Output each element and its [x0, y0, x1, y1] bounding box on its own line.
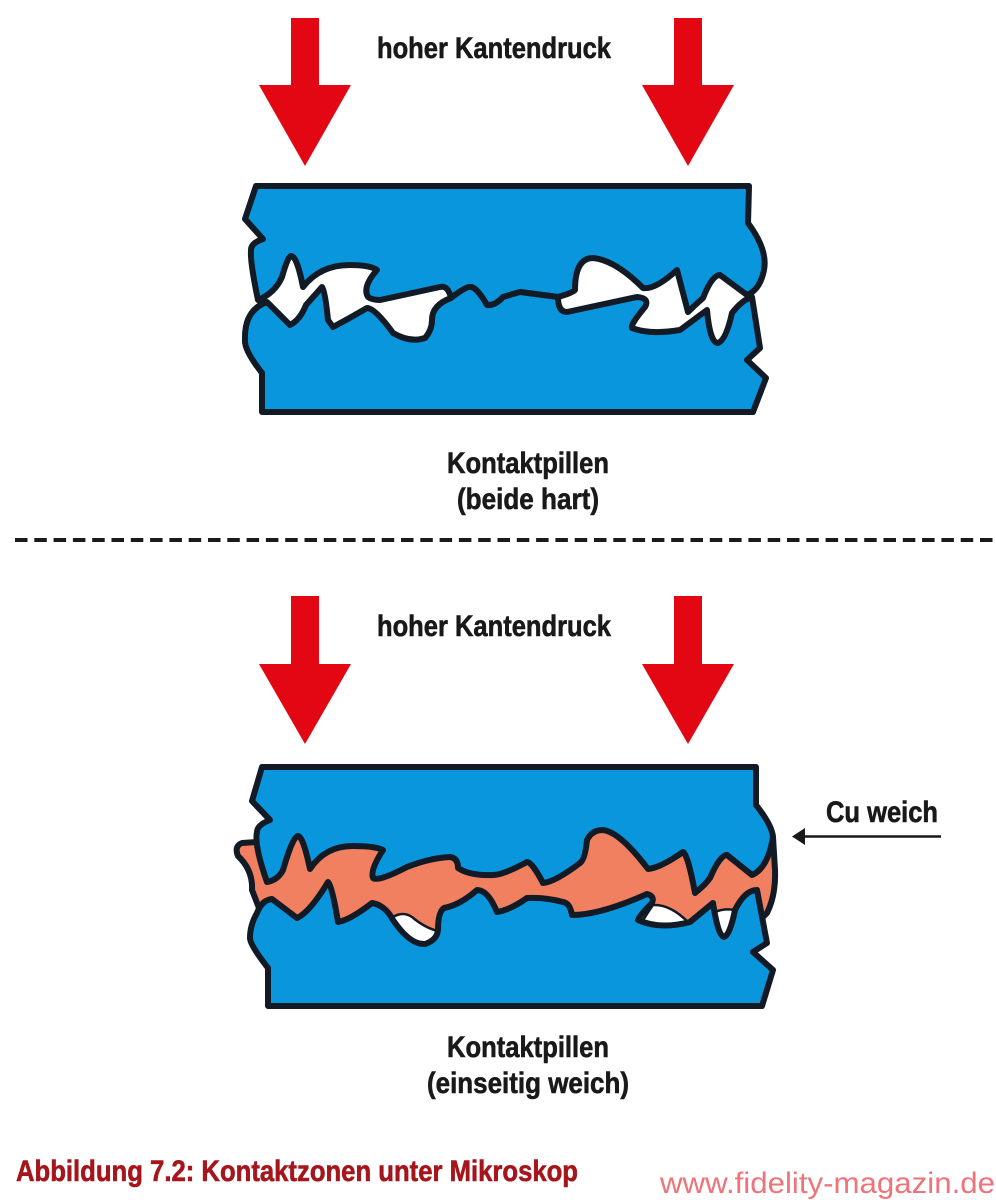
arrow: left pressure arrow, bottom panel	[259, 596, 351, 744]
caption: contact pads both hard: Kontaktpillen	[447, 447, 609, 480]
diagram: hard pad against soft copper pad	[237, 767, 775, 1006]
white air pocket, right	[715, 909, 735, 945]
diagram: two hard contact pads	[245, 186, 766, 412]
figure caption: Abbildung 7.2: Kontaktzonen unter Mikroskop	[16, 1155, 578, 1188]
heading: high edge pressure, bottom panel: hoher Kantendruck	[377, 610, 612, 643]
upper hard contact pad	[252, 767, 773, 893]
caption: contact pads one side soft	[427, 1031, 629, 1100]
white air pocket, centre right	[640, 905, 688, 935]
lower hard contact pad	[245, 287, 766, 412]
watermark url: www.fidelity-magazin.de	[659, 1167, 995, 1200]
arrow: right pressure arrow, top panel	[642, 18, 734, 166]
caption: contact pads one side soft: Kontaktpillen	[447, 1031, 609, 1064]
caption: contact pads both hard: (beide hart)	[457, 483, 599, 516]
lower hard contact pad	[250, 882, 773, 1006]
panel: both contacts hard	[245, 18, 766, 516]
soft copper layer	[237, 810, 775, 960]
callout: soft copper	[792, 796, 941, 845]
white air gap between pads	[262, 255, 752, 345]
upper hard contact pad	[245, 186, 765, 312]
caption: contact pads one side soft: (einseitig weich)	[427, 1067, 629, 1100]
callout: soft copper: Cu weich	[826, 796, 938, 829]
arrow: left pressure arrow, top panel	[259, 18, 351, 166]
heading: high edge pressure, top panel: hoher Kantendruck	[377, 32, 612, 65]
arrow: right pressure arrow, bottom panel	[642, 596, 734, 744]
caption: contact pads both hard	[447, 447, 609, 516]
white air pocket, left	[393, 914, 440, 950]
panel: one contact soft	[237, 596, 941, 1100]
